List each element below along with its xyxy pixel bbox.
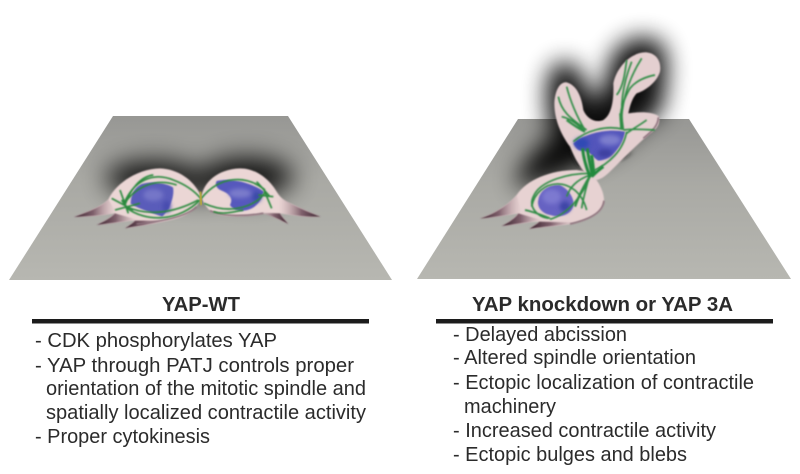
contact shadow: left xyxy=(105,157,293,197)
panel: YAP-WT cell illustration xyxy=(9,116,392,280)
midbody xyxy=(200,192,201,205)
list: YAP-WT effects xyxy=(35,330,366,448)
list: YAP-WT effects: - CDK phosphorylates YAP xyxy=(35,330,277,352)
list: knockdown effects: - Delayed abcission xyxy=(453,324,627,346)
chromatin texture xyxy=(542,135,621,212)
spindle fibres xyxy=(525,58,655,219)
panel: YAP knockdown summary xyxy=(436,294,773,466)
chromatin left xyxy=(131,182,173,217)
shadow under cell: right xyxy=(570,150,633,167)
chromatin upper xyxy=(573,131,625,161)
list: knockdown effects: - Increased contractile activity xyxy=(453,420,716,442)
chromatin right xyxy=(216,180,264,211)
upper cell body with blebs xyxy=(554,52,660,180)
spindle fibres xyxy=(112,175,273,218)
ground plane: right xyxy=(417,119,791,279)
list: knockdown effects xyxy=(453,324,754,466)
chromatin texture xyxy=(143,189,261,213)
list: YAP-WT effects: - YAP through PATJ controls proper xyxy=(35,355,354,377)
list: knockdown effects: - Altered spindle orientation xyxy=(453,347,696,369)
list: YAP-WT effects: spatially localized contractile activity xyxy=(46,402,366,424)
dark filopodia tips xyxy=(74,197,321,228)
cell underside shading xyxy=(137,207,263,224)
chromatin lower xyxy=(538,185,574,216)
cell edge shading xyxy=(570,117,658,224)
filopodia tips xyxy=(480,195,577,229)
ground plane: left xyxy=(9,116,392,280)
panel: YAP-WT summary xyxy=(32,294,369,448)
rule: left xyxy=(32,319,369,324)
heading: YAP-WT: YAP-WT xyxy=(162,294,240,316)
list: knockdown effects: - Ectopic bulges and blebs xyxy=(453,444,687,466)
list: YAP-WT effects: orientation of the mitotic spindle and xyxy=(46,378,366,400)
list: YAP-WT effects: - Proper cytokinesis xyxy=(35,426,210,448)
list: knockdown effects: - Ectopic localization of contractile xyxy=(453,372,754,394)
central spindle bundle xyxy=(583,148,603,177)
misshapen cell with blebs xyxy=(480,52,660,229)
rule: right xyxy=(436,319,773,324)
heading: YAP knockdown or YAP 3A: YAP knockdown or YAP 3A xyxy=(472,294,733,316)
lower cell body xyxy=(480,170,604,229)
list: knockdown effects: machinery xyxy=(464,396,556,418)
panel: YAP knockdown cell illustration xyxy=(417,37,791,279)
dividing cells: left xyxy=(74,168,321,228)
daughter cell right body xyxy=(201,168,321,224)
daughter cell left body xyxy=(74,168,201,228)
contact shadow: right xyxy=(513,37,667,187)
